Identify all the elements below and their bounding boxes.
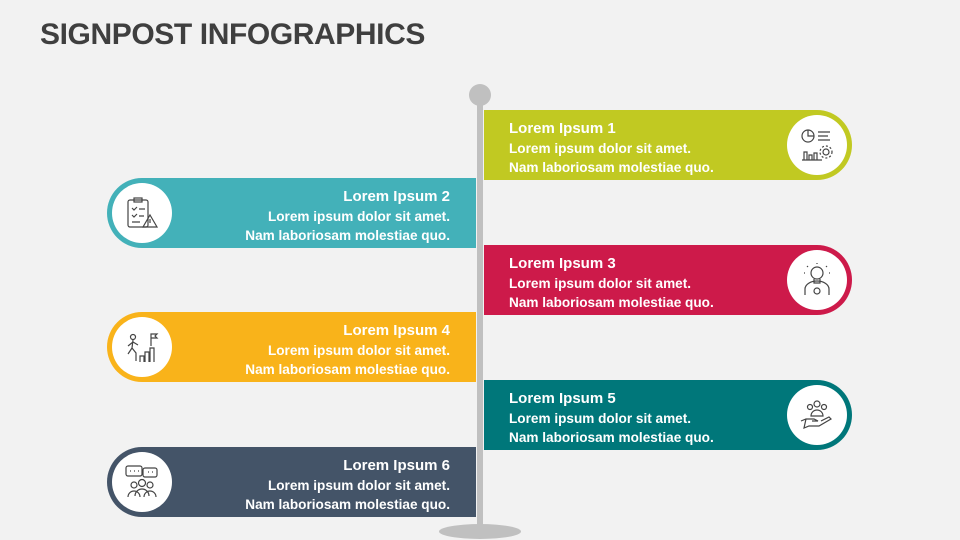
sign 5: Nam laboriosam molestiae quo. [509,430,714,445]
icon: chat group [112,452,172,512]
sign 5: Lorem Ipsum 5 [509,390,616,407]
sign 3: Nam laboriosam molestiae quo. [509,295,714,310]
sign 4: Lorem Ipsum 4 [343,322,450,339]
icon: charts [787,115,847,175]
icon: clipboard [112,183,172,243]
sign 1: Lorem ipsum dolor sit amet. [509,140,691,156]
icon: climber [112,317,172,377]
sign 5: Lorem ipsum dolor sit amet. [509,410,691,426]
sign 1: Lorem Ipsum 1 [509,120,616,137]
sign 1: Nam laboriosam molestiae quo. [509,160,714,175]
title: SIGNPOST INFOGRAPHICS [40,18,425,51]
sign 6: Lorem Ipsum 6 [343,457,450,474]
sign 3: Lorem Ipsum 3 [509,255,616,272]
sign 4: Nam laboriosam molestiae quo. [245,362,450,377]
sign 2: Lorem ipsum dolor sit amet. [268,208,450,224]
sign 6: Nam laboriosam molestiae quo. [245,497,450,512]
sign 3: Lorem ipsum dolor sit amet. [509,276,691,290]
sign 2: Lorem Ipsum 2 [343,188,450,205]
icon: bulb gear [787,250,847,310]
sign 6: Lorem ipsum dolor sit amet. [268,478,450,492]
icon: hand people [787,385,847,445]
sign 4 [107,312,476,382]
sign 3 [484,245,852,315]
sign 1 [484,110,852,180]
sign 5 [484,380,852,450]
sign 6 [107,447,476,517]
sign 2: Nam laboriosam molestiae quo. [245,228,450,243]
sign 4: Lorem ipsum dolor sit amet. [268,342,450,358]
sign 2 [107,178,476,248]
pole [439,84,521,539]
